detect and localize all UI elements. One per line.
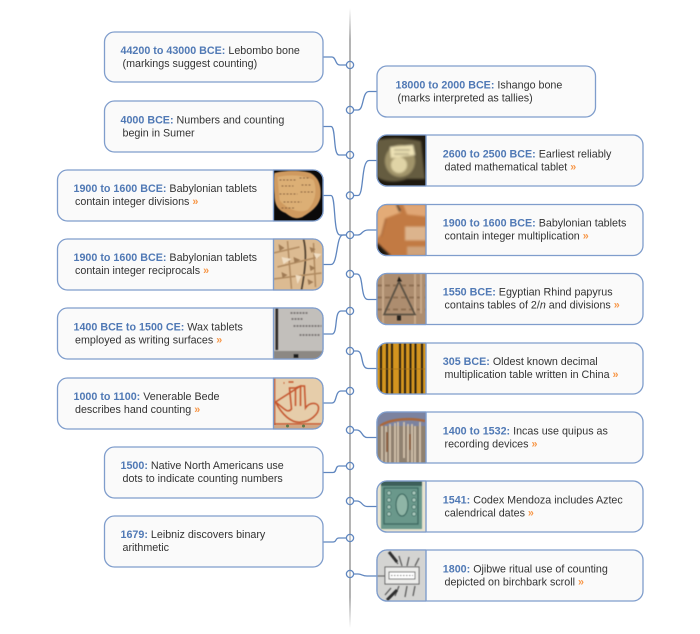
panel: Babylonian integer reciprocals: 1900 to 1600 BCE: Babylonian tablets (74, 252, 257, 264)
panel: decimal multiplication table: multiplication table written in China » (444, 369, 619, 381)
panel: Earliest mathematical tablet: 2600 to 2500 BCE: Earliest reliably (443, 148, 612, 160)
timeline nodes (346, 61, 354, 578)
panel: Ojibwe birchbark: depicted on birchbark scroll » (444, 576, 584, 588)
panel: Babylonian integer reciprocals (58, 239, 324, 290)
panel: Numbers in Sumer: begin in Sumer (122, 128, 195, 140)
panel: Ishango bone: 18000 to 2000 BCE: Ishango bone (396, 80, 562, 92)
image: orange tablet (377, 204, 426, 256)
panel: Earliest mathematical tablet: dated mathematical tablet » (444, 162, 576, 174)
panel: Babylonian integer divisions (58, 170, 324, 221)
connectors (323, 57, 377, 576)
panel: Native North Americans (104, 447, 323, 498)
panel: Wax tablets (58, 308, 324, 359)
panel: Leibniz (104, 516, 323, 567)
panel: Incas quipus: recording devices » (444, 438, 538, 450)
panel: Codex Mendoza: 1541: Codex Mendoza includes Aztec (443, 494, 623, 506)
panel: Rhind papyrus: 1550 BCE: Egyptian Rhind papyrus (443, 286, 613, 298)
panel: Leibniz: 1679: Leibniz discovers binary (120, 529, 266, 541)
panel: Ishango bone: (marks interpreted as tallies) (398, 92, 533, 104)
panel: Wax tablets: employed as writing surfaces » (75, 334, 222, 346)
panel: Codex Mendoza (377, 481, 643, 532)
panel: Venerable Bede (58, 378, 324, 429)
image: wax tablet (274, 308, 324, 359)
panel: Leibniz: arithmetic (122, 542, 170, 554)
panel: Incas quipus: 1400 to 1532: Incas use quipus as (443, 426, 608, 438)
panel: Ishango bone (377, 66, 596, 117)
panel: Lebombo bone: (markings suggest counting) (122, 58, 257, 70)
panel: decimal multiplication table: 305 BCE: Oldest known decimal (443, 356, 598, 368)
panel: Lebombo bone: 44200 to 43000 BCE: Lebombo bone (120, 45, 300, 57)
panel: Rhind papyrus (377, 274, 643, 324)
image: cuneiform tablet (274, 239, 324, 290)
panel: Ojibwe birchbark (377, 550, 643, 601)
panel: Babylonian integer multiplication: 1900 to 1600 BCE: Babylonian tablets (443, 218, 626, 230)
panel: Babylonian integer multiplication (377, 204, 643, 256)
image: bamboo strips (377, 343, 426, 394)
panel: decimal multiplication table (377, 343, 643, 394)
panel: Native North Americans: dots to indicate counting numbers (122, 473, 283, 485)
panel: Babylonian integer reciprocals: contain integer reciprocals » (75, 265, 209, 277)
panel: Babylonian integer divisions: 1900 to 1600 BCE: Babylonian tablets (74, 183, 257, 195)
image: clay tablet on black (274, 170, 324, 221)
image: hand drawing (274, 378, 324, 429)
image: papyrus triangle (377, 274, 426, 324)
image: Aztec glyph (377, 481, 426, 532)
panel: Numbers in Sumer: 4000 BCE: Numbers and counting (120, 114, 284, 126)
panel: Rhind papyrus: contains tables of 2/n and divisions » (444, 300, 620, 312)
panel: Babylonian integer divisions: contain integer divisions » (75, 196, 198, 208)
image: quipu (377, 412, 426, 463)
panel: Codex Mendoza: calendrical dates » (444, 508, 534, 520)
panel: Numbers in Sumer (104, 101, 323, 152)
panel: Native North Americans: 1500: Native North Americans use (120, 460, 284, 472)
panel: Incas quipus (377, 412, 643, 463)
image: dated tablet (377, 135, 426, 186)
panel: Ojibwe birchbark: 1800: Ojibwe ritual use of counting (443, 564, 608, 576)
panel: Earliest mathematical tablet (377, 135, 643, 186)
panel: Venerable Bede: 1000 to 1100: Venerable Bede (74, 391, 220, 403)
panel: Babylonian integer multiplication: contain integer multiplication » (444, 230, 589, 242)
panel: Venerable Bede: describes hand counting » (75, 404, 200, 416)
panel: Wax tablets: 1400 BCE to 1500 CE: Wax tablets (74, 322, 243, 334)
panel: Lebombo bone (104, 32, 323, 82)
timeline axis (349, 8, 351, 628)
image: birchbark scroll (377, 550, 426, 601)
